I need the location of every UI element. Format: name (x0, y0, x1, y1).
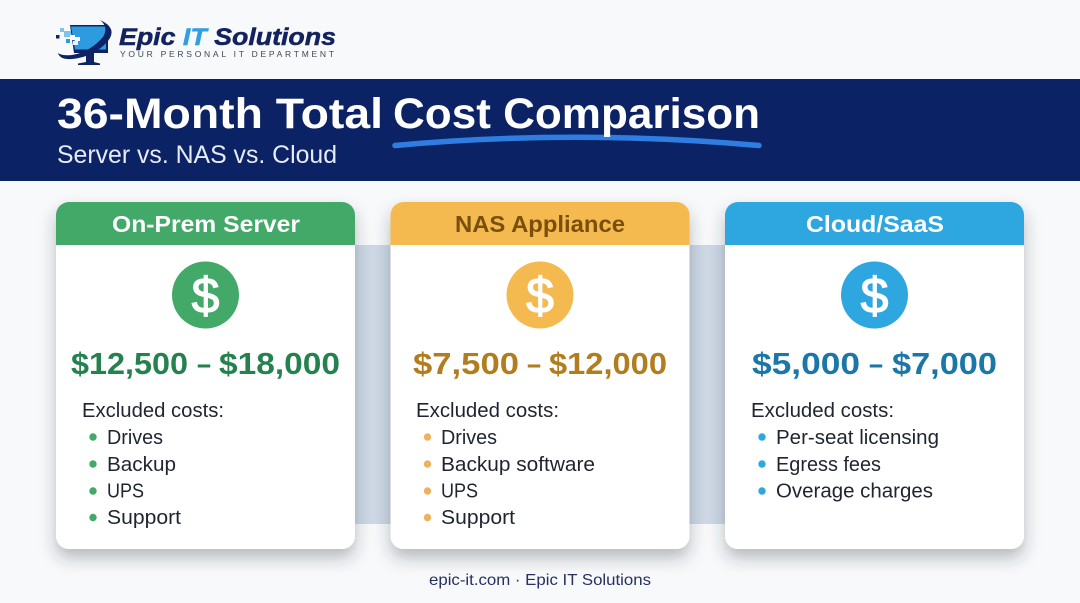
card body (390, 202, 690, 549)
price range: – (869, 346, 883, 381)
icon: dollar (506, 262, 574, 328)
price range: $7,000 (892, 346, 997, 381)
heading: On-Prem Server (112, 211, 300, 237)
excluded costs: Overage charges (776, 480, 933, 502)
icon: dollar (172, 262, 239, 328)
card header (390, 202, 690, 245)
icon: dollar: $ (526, 268, 554, 324)
excluded costs: Drives (441, 427, 497, 449)
title: 36-Month Total (57, 90, 383, 138)
panel: cloud/saas (725, 202, 1024, 549)
heading: Cloud/SaaS (806, 211, 944, 237)
title: Cost Comparison (393, 90, 760, 138)
logo wordmark: Epic IT Solutions (119, 24, 336, 51)
excluded costs: Excluded costs: (416, 400, 559, 422)
price range: $7,500 (413, 346, 519, 381)
excluded costs: Excluded costs: (82, 400, 224, 422)
icon: dollar: $ (861, 268, 888, 324)
price range: $12,500 (71, 346, 188, 381)
excluded costs (416, 400, 595, 529)
price range (71, 346, 340, 381)
icon: dollar: $ (192, 268, 219, 324)
excluded costs: Backup software (441, 454, 595, 476)
price range: $12,000 (549, 346, 667, 381)
card header (56, 202, 355, 245)
title banner (0, 79, 1080, 181)
price range: $5,000 (752, 346, 860, 381)
price range: – (527, 346, 541, 381)
card header (725, 202, 1024, 245)
excluded costs: UPS (107, 480, 144, 502)
excluded costs: Backup (107, 454, 176, 476)
excluded costs: Excluded costs: (751, 400, 894, 422)
price range: – (197, 346, 211, 381)
excluded costs: UPS (441, 480, 478, 502)
title (57, 90, 760, 138)
excluded costs: Drives (107, 427, 163, 449)
panel: nas appliance (390, 202, 690, 549)
heading: NAS Appliance (455, 211, 625, 237)
price range (413, 346, 667, 381)
panel: on-prem server (56, 202, 355, 549)
subtitle: Server vs. NAS vs. Cloud (57, 141, 337, 169)
excluded costs: Support (107, 507, 181, 529)
underline accent (395, 137, 759, 146)
connector band (350, 245, 730, 524)
price range: $18,000 (219, 346, 340, 381)
card body (725, 202, 1024, 549)
logo (56, 20, 336, 65)
logo tagline: YOUR PERSONAL IT DEPARTMENT (120, 49, 334, 59)
card body (56, 202, 355, 549)
excluded costs (82, 400, 224, 529)
icon: monitor (56, 20, 112, 65)
icon: dollar (841, 262, 908, 328)
price range (752, 346, 997, 381)
excluded costs: Egress fees (776, 454, 881, 476)
excluded costs (751, 400, 939, 502)
excluded costs: Per-seat licensing (776, 427, 939, 449)
footer: epic-it.com · Epic IT Solutions (429, 572, 651, 589)
excluded costs: Support (441, 507, 515, 529)
